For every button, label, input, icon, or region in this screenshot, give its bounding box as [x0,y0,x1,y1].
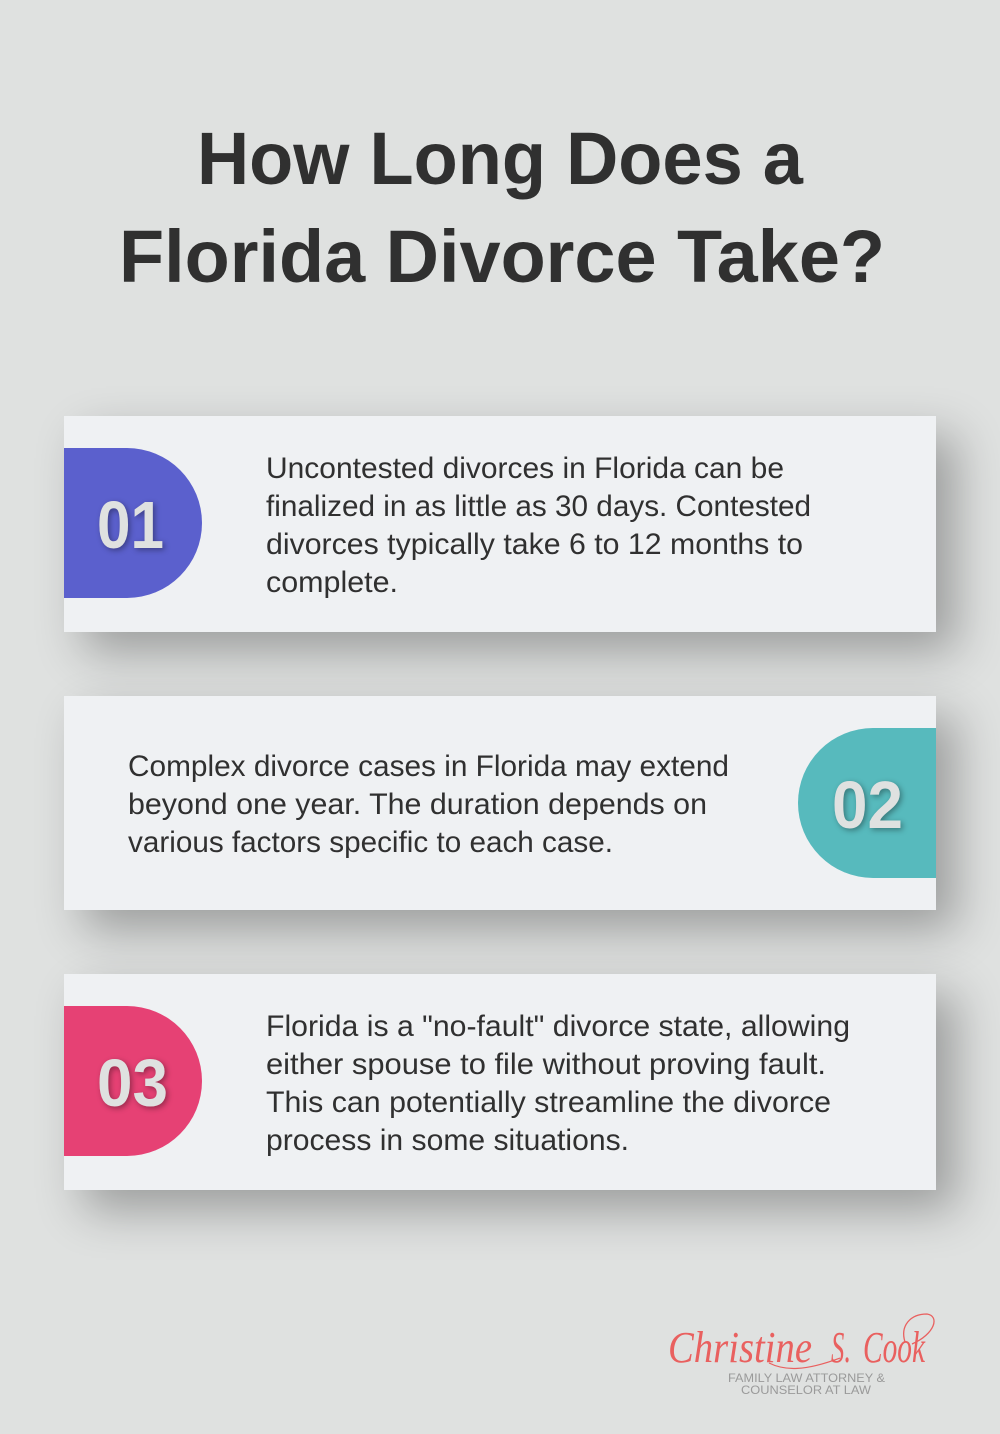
card 1 background [64,416,936,632]
step 1 badge: 01 [97,488,164,563]
step 2 badge: 02 [832,768,903,843]
step 3 badge [64,1006,202,1156]
step 3 badge: 03 [97,1046,168,1121]
title [119,117,885,298]
step 3 text [266,1010,850,1157]
logo: Christine S. Cook [668,1314,934,1397]
step 3 text: This can potentially streamline the divorce [266,1086,831,1119]
logo: Christine S. Cook: Cook [863,1323,926,1372]
step 1 text: complete. [266,566,398,599]
step 3 text: process in some situations. [266,1124,629,1157]
step 1 text: divorces typically take 6 to 12 months to [266,528,803,561]
step 3 text: either spouse to file without proving fault. [266,1048,826,1081]
logo: Christine S. Cook: S. [831,1323,851,1372]
card 3 background [64,974,936,1190]
step 2 text [128,750,729,859]
step 2 badge [798,728,936,878]
step 1 text: Uncontested divorces in Florida can be [266,452,784,485]
step 2 text: beyond one year. The duration depends on [128,788,707,821]
logo: Christine S. Cook: COUNSELOR AT LAW [741,1385,871,1397]
logo: Christine S. Cook: Christine [668,1323,812,1372]
step 1 text: finalized in as little as 30 days. Contested [266,490,811,523]
title: Florida Divorce Take? [119,215,885,298]
step 2 text: Complex divorce cases in Florida may extend [128,750,729,783]
step 2 text: various factors specific to each case. [128,826,613,859]
step 3 text: Florida is a "no-fault" divorce state, allowing [266,1010,850,1043]
step 1 badge [64,448,202,598]
logo: Christine S. Cook: FAMILY LAW ATTORNEY & [728,1373,885,1385]
card 2 background [64,696,936,910]
step 1 text [266,452,811,599]
title: How Long Does a [197,117,804,200]
